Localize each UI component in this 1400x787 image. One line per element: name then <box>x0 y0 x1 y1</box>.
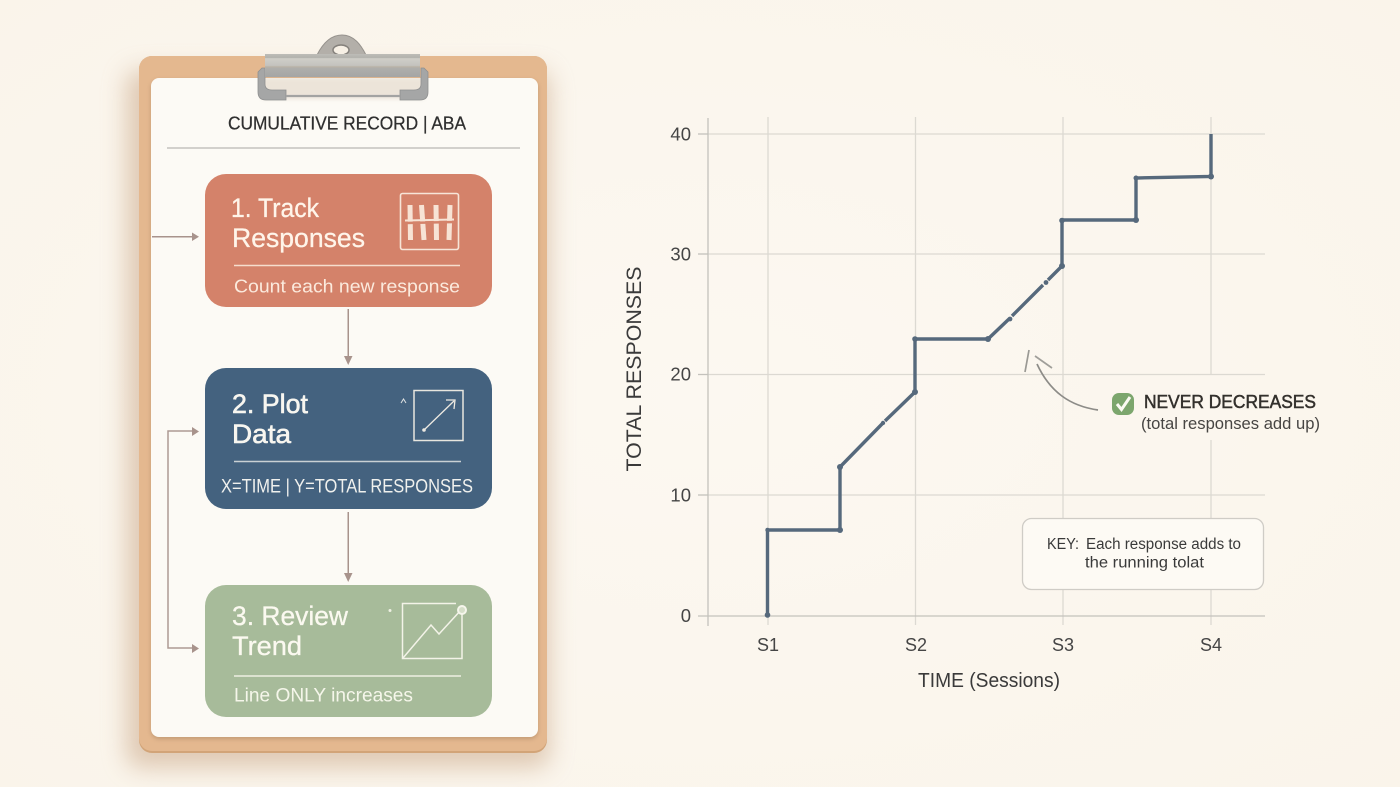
step 2 caption: X=TIME | Y=TOTAL RESPONSES <box>221 476 473 498</box>
heading: step 1: Responses <box>232 223 365 253</box>
panel: step 3 review trend <box>205 585 492 717</box>
icon: axes with diagonal arrow <box>401 390 463 440</box>
arrow: step 2 to step 3 <box>344 512 352 582</box>
y axis tick labels: 30 <box>670 244 691 264</box>
heading: step 3 <box>232 601 348 661</box>
icon: green check <box>1112 393 1134 415</box>
heading: step 3: Trend <box>232 631 302 661</box>
icon: tally marks <box>400 194 458 250</box>
icon: metal clip <box>258 35 428 100</box>
callout: key box: KEY: <box>1047 536 1079 553</box>
chart axes <box>698 118 1265 626</box>
chart grid <box>707 117 1265 625</box>
x axis tick labels: S3 <box>1052 635 1074 655</box>
y axis tick labels: 20 <box>670 364 691 384</box>
arrow: step 1 to step 2 <box>344 309 352 365</box>
callout: never decreases <box>1112 391 1320 433</box>
chart: cumulative record <box>623 117 1320 692</box>
callout: key box <box>1022 518 1264 590</box>
arrow: into step 1 <box>152 232 199 241</box>
heading: step 1 <box>231 193 365 253</box>
panel: step 2 plot data <box>205 368 492 509</box>
y axis tick labels: 40 <box>670 124 691 144</box>
icon: rising trend chart <box>388 604 466 658</box>
callout: key box: the running tolat <box>1085 554 1205 572</box>
x axis tick labels: S2 <box>905 635 927 655</box>
callout: never decreases: NEVER DECREASES <box>1144 391 1316 412</box>
arrow: callout pointer <box>1025 350 1098 410</box>
heading: step 2 <box>232 389 308 449</box>
x axis tick labels: S1 <box>757 635 779 655</box>
heading: step 2: Data <box>232 419 292 449</box>
y axis title: TOTAL RESPONSES <box>623 266 646 472</box>
panel: clipboard <box>126 35 550 768</box>
heading: step 1: 1. Track <box>231 193 319 223</box>
arrow: loop to steps 2 and 3 <box>168 427 199 653</box>
heading: step 2: 2. Plot <box>232 389 308 419</box>
title: CUMULATIVE RECORD | ABA <box>228 114 466 134</box>
x axis tick labels: S4 <box>1200 635 1222 655</box>
callout: never decreases: (total responses add up) <box>1141 415 1320 433</box>
heading: step 3: 3. Review <box>232 601 348 631</box>
y axis tick labels: 0 <box>681 605 691 626</box>
paper sheet <box>151 78 538 739</box>
cumulative line <box>765 134 1214 618</box>
x axis title: TIME (Sessions) <box>918 670 1060 692</box>
step 1 caption: Count each new response <box>234 276 460 296</box>
panel: step 1 track responses <box>205 174 492 307</box>
callout: key box: Each response adds to <box>1086 536 1241 553</box>
clipboard board <box>139 56 547 753</box>
y axis tick labels <box>670 124 691 626</box>
step 3 caption: Line ONLY increases <box>234 686 413 706</box>
x axis tick labels <box>757 635 1222 655</box>
y axis tick labels: 10 <box>670 484 691 506</box>
